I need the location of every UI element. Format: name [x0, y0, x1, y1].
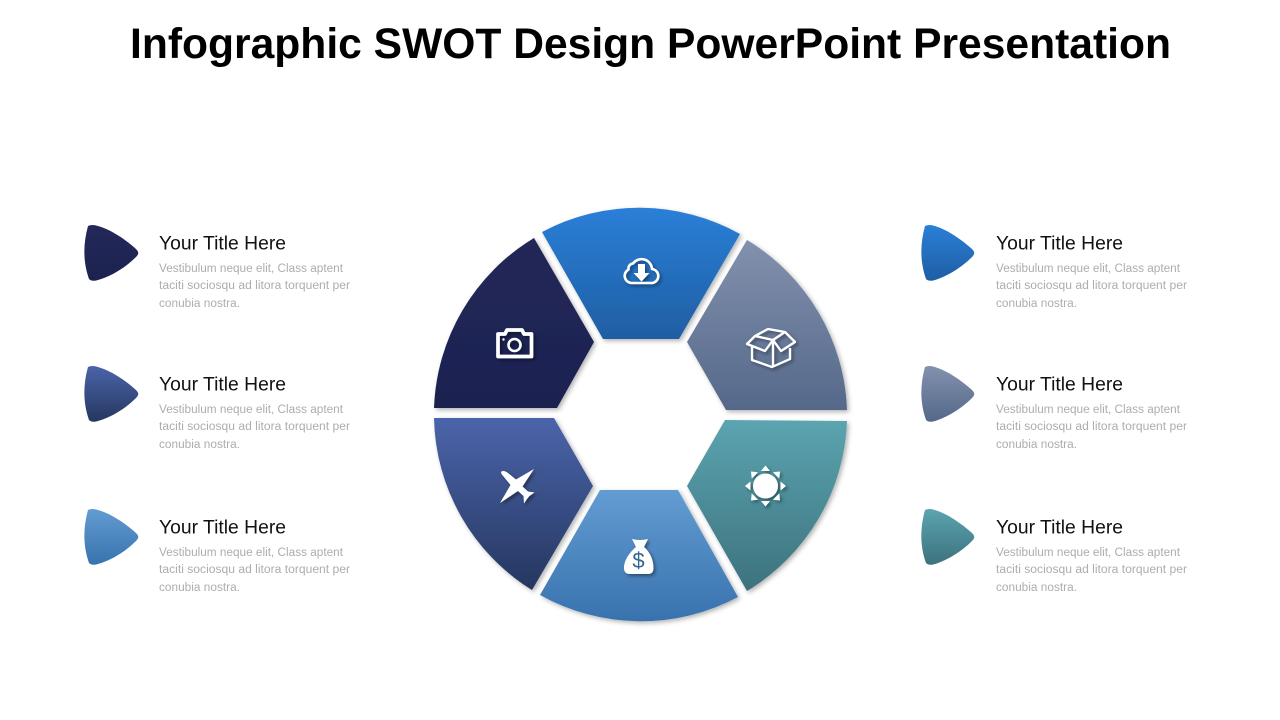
icon: airplane: [500, 469, 534, 504]
body text: taciti sociosqu ad litora torquent per: [996, 421, 1187, 433]
icon: slate pointer: [921, 366, 974, 422]
segment: top-left navy: [434, 238, 594, 408]
icon: cloud download: [625, 259, 658, 283]
segment: bottom light blue: [540, 490, 738, 621]
body text: taciti sociosqu ad litora torquent per: [159, 280, 350, 292]
right item 3: [921, 509, 1187, 594]
left item 1: [84, 225, 350, 310]
icon: open box: [747, 329, 795, 367]
body text: taciti sociosqu ad litora torquent per: [996, 564, 1187, 576]
right item 2: [921, 366, 1187, 451]
icon: money bag: [624, 539, 654, 574]
body text: conubia nostra.: [996, 439, 1077, 451]
heading: Your Title Here: [159, 374, 286, 396]
body text: conubia nostra.: [159, 298, 240, 310]
icon: indigo pointer: [84, 366, 138, 422]
icon: light blue pointer: [84, 509, 138, 565]
icon: money bag: $: [632, 548, 645, 573]
body text: Vestibulum neque elit, Class aptent: [996, 263, 1181, 275]
body text: Vestibulum neque elit, Class aptent: [996, 547, 1181, 559]
heading: Your Title Here: [996, 374, 1123, 396]
left item 3: [84, 509, 350, 594]
icon: camera: [498, 330, 532, 356]
body text: taciti sociosqu ad litora torquent per: [996, 280, 1187, 292]
heading: Your Title Here: [996, 518, 1123, 538]
icon: sun: [745, 466, 786, 506]
body text: taciti sociosqu ad litora torquent per: [159, 564, 350, 576]
heading: Your Title Here: [159, 234, 286, 254]
title: Infographic SWOT Design PowerPoint Presentation: [130, 20, 1171, 68]
segment: top blue: [542, 208, 740, 339]
body text: taciti sociosqu ad litora torquent per: [159, 421, 350, 433]
segment: top-right slate: [687, 240, 847, 410]
left item 2: [84, 366, 350, 451]
body text: Vestibulum neque elit, Class aptent: [159, 404, 344, 416]
segment: bottom-left indigo: [434, 418, 593, 590]
body text: conubia nostra.: [159, 582, 240, 594]
heading: Your Title Here: [159, 518, 286, 538]
icon: teal pointer: [921, 509, 974, 565]
body text: conubia nostra.: [996, 582, 1077, 594]
segment: bottom-right teal: [687, 420, 847, 591]
icon: navy pointer: [84, 225, 138, 281]
icon: blue pointer: [921, 225, 974, 281]
hexagonal ring diagram: [434, 208, 847, 621]
right item 1: [921, 225, 1187, 310]
body text: conubia nostra.: [996, 298, 1077, 310]
body text: Vestibulum neque elit, Class aptent: [996, 404, 1181, 416]
body text: Vestibulum neque elit, Class aptent: [159, 263, 344, 275]
body text: conubia nostra.: [159, 439, 240, 451]
heading: Your Title Here: [996, 234, 1123, 254]
body text: Vestibulum neque elit, Class aptent: [159, 547, 344, 559]
